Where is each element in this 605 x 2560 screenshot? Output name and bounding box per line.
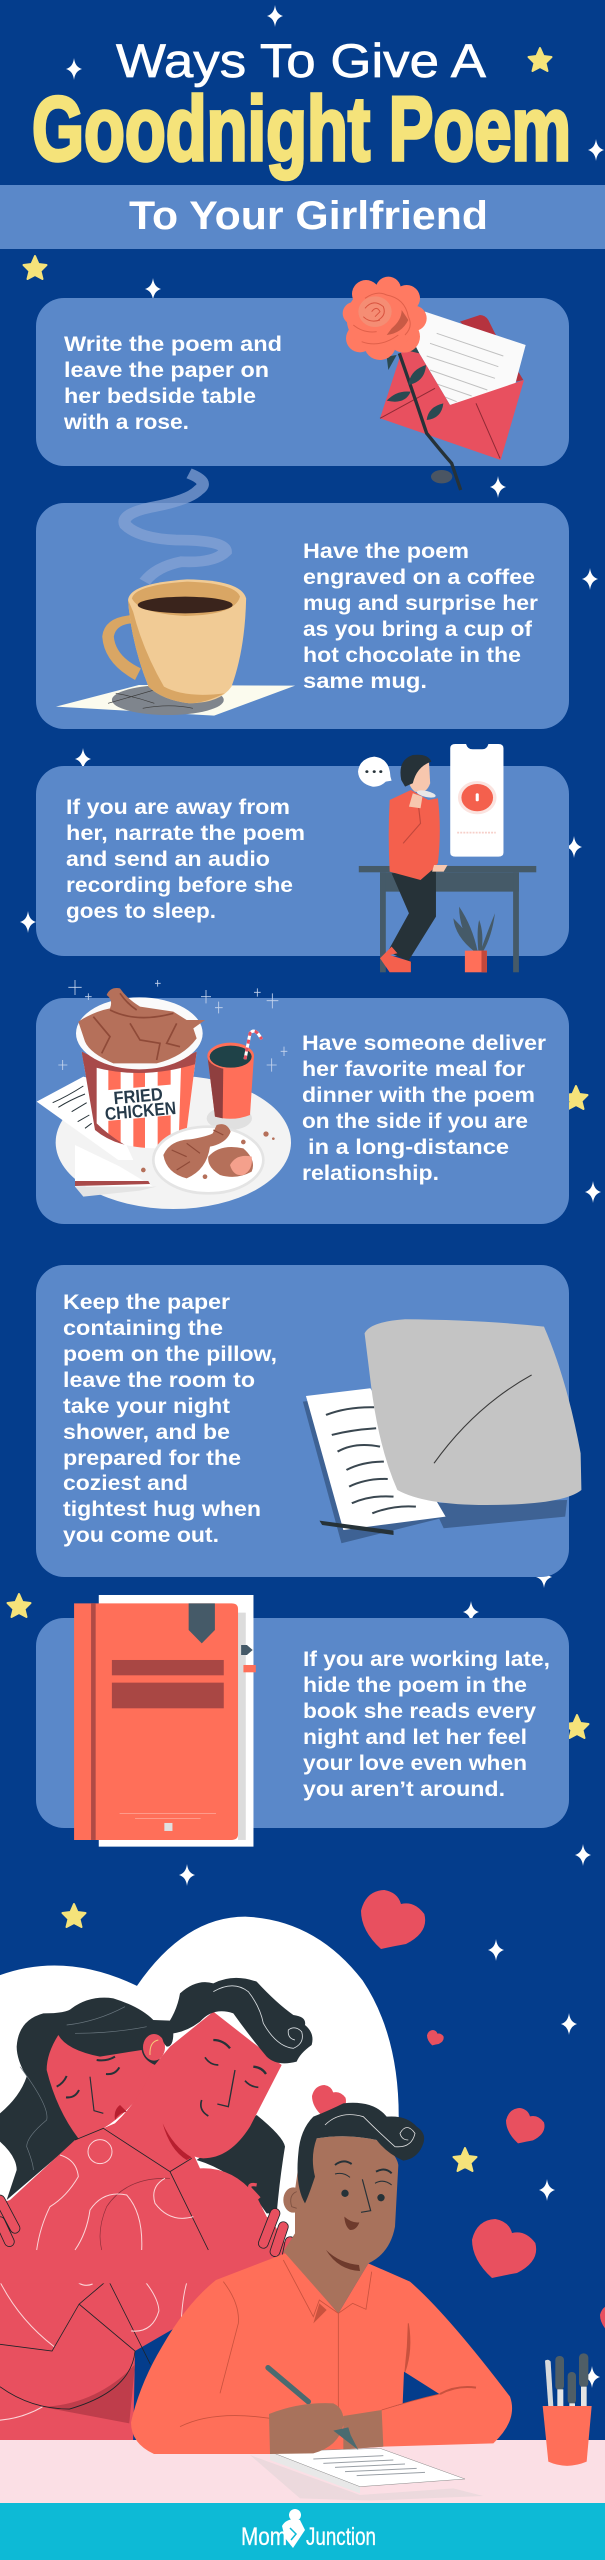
text: tip 1 bbox=[63, 333, 282, 434]
panel: tip 4 background bbox=[36, 998, 569, 1224]
text: tip 5: leave the room to bbox=[63, 1369, 255, 1392]
icon: red book bbox=[74, 1595, 256, 1847]
ear detail bbox=[291, 2192, 297, 2208]
icon: fried chicken meal: CHICKEN bbox=[104, 1098, 177, 1124]
phone bbox=[450, 744, 503, 857]
text: tip 2: same mug. bbox=[303, 670, 427, 693]
text: tip 6: book she reads every bbox=[303, 1700, 536, 1723]
panel: tip 2 background bbox=[36, 503, 569, 729]
text: tip 5: poem on the pillow, bbox=[63, 1343, 277, 1366]
text: tip 5: Keep the paper bbox=[63, 1291, 230, 1314]
text: tip 1: leave the paper on bbox=[64, 359, 269, 382]
icon: floating hearts bbox=[361, 1890, 605, 2333]
text: tip 2: hot chocolate in the bbox=[303, 644, 521, 667]
arm gap bbox=[403, 2372, 439, 2404]
arm gap front bbox=[382, 2372, 439, 2410]
text: tip 4: on the side if you are bbox=[302, 1110, 528, 1133]
pen bbox=[268, 2368, 308, 2402]
hair bbox=[297, 2103, 424, 2203]
hugging man's head bbox=[103, 2012, 282, 2172]
icon: fried chicken meal: FRIED bbox=[113, 1084, 164, 1108]
subtitle band bbox=[0, 185, 605, 249]
text: tip 4: in a long-distance bbox=[308, 1136, 509, 1159]
icon: pillow with poem paper bbox=[303, 1319, 581, 1543]
text: tip 1: with a rose. bbox=[63, 411, 189, 434]
plant bbox=[453, 907, 495, 972]
facial features bbox=[325, 2115, 415, 2271]
hugging man's features bbox=[201, 1986, 302, 2116]
text: tip 3 bbox=[66, 796, 305, 923]
woman's lips bbox=[115, 2105, 127, 2120]
icon: man recording a voice message at a desk bbox=[358, 744, 536, 972]
panel: tip 3 background bbox=[36, 766, 569, 956]
text: tip 2: mug and surprise her bbox=[303, 592, 538, 615]
text: tip 1: her bedside table bbox=[64, 385, 256, 408]
text: tip 2 bbox=[303, 540, 538, 693]
hands bbox=[269, 2403, 383, 2454]
logo bbox=[241, 2509, 376, 2551]
back outlines bbox=[37, 2128, 259, 2250]
text: tip 3: goes to sleep. bbox=[66, 900, 216, 923]
text: tip 3: recording before she bbox=[66, 874, 293, 897]
icon: fried chicken meal bbox=[37, 980, 291, 1209]
text: tip 6: you aren’t around. bbox=[303, 1778, 505, 1801]
panel: tip 5 background bbox=[36, 1265, 569, 1577]
text: tip 5: tightest hug when bbox=[63, 1498, 261, 1521]
ear highlight bbox=[150, 2040, 158, 2055]
text: tip 4: her favorite meal for bbox=[302, 1058, 525, 1081]
text: tip 4: relationship. bbox=[302, 1162, 439, 1185]
text: tip 6: your love even when bbox=[303, 1752, 527, 1775]
icon: rose and envelope bbox=[343, 277, 526, 490]
pen cup bbox=[543, 2353, 592, 2466]
ear bbox=[283, 2187, 303, 2213]
text: tip 5: you come out. bbox=[63, 1524, 219, 1547]
text: tip 5: prepared for the bbox=[63, 1447, 241, 1470]
title: Ways To Give A bbox=[116, 34, 487, 87]
text: tip 4 bbox=[302, 1032, 546, 1185]
upper body bbox=[0, 2067, 290, 2283]
woman's face bbox=[47, 2035, 155, 2138]
text: tip 2: Have the poem bbox=[303, 540, 469, 563]
text: tip 6 bbox=[303, 1648, 550, 1801]
text: tip 3: and send an audio bbox=[66, 848, 270, 871]
hugging man's hair bbox=[162, 1978, 312, 2063]
table bbox=[359, 866, 536, 972]
head and neck bbox=[283, 2136, 398, 2313]
woman's hair bbox=[0, 1998, 285, 2213]
text: tip 5 bbox=[63, 1291, 277, 1547]
text: tip 6: If you are working late, bbox=[303, 1648, 550, 1671]
text: tip 5: take your night bbox=[63, 1395, 230, 1418]
chin shadow bbox=[163, 2123, 192, 2160]
footer band bbox=[0, 2503, 605, 2560]
text: tip 4: Have someone deliver bbox=[302, 1032, 546, 1055]
icon: coffee mug on a paper bbox=[56, 473, 295, 716]
hands on shoulders bbox=[0, 2200, 290, 2258]
text: tip 6: night and let her feel bbox=[303, 1726, 527, 1749]
speech bubble bbox=[358, 757, 392, 787]
shirt bbox=[131, 2253, 512, 2454]
couple's heads and upper bodies bbox=[0, 1978, 312, 2283]
panel: tip 1 background bbox=[36, 298, 569, 466]
text: tip 3: If you are away from bbox=[66, 796, 290, 819]
subtitle band: To Your Girlfriend bbox=[129, 194, 488, 238]
panel: tip 6 background bbox=[36, 1618, 569, 1828]
text: tip 4: dinner with the poem bbox=[302, 1084, 535, 1107]
couple's lower body bbox=[0, 2217, 285, 2442]
text: tip 3: her, narrate the poem bbox=[66, 822, 305, 845]
text: tip 2: engraved on a coffee bbox=[303, 566, 535, 589]
text: tip 2: as you bring a cup of bbox=[303, 618, 533, 641]
desk bbox=[0, 2440, 605, 2503]
woman's features bbox=[20, 2007, 147, 2170]
paper on desk bbox=[270, 2448, 465, 2493]
white heart backdrop bbox=[0, 1917, 399, 2262]
logo: Mom bbox=[241, 2523, 287, 2551]
seated man writing bbox=[131, 2103, 592, 2501]
text: tip 6: hide the poem in the bbox=[303, 1674, 527, 1697]
shirt details bbox=[180, 2260, 476, 2427]
paper shadow bbox=[250, 2455, 483, 2501]
person bbox=[380, 755, 448, 972]
ear bbox=[143, 2034, 165, 2061]
text: tip 1: Write the poem and bbox=[64, 333, 282, 356]
logo: Junction bbox=[306, 2523, 376, 2551]
title bbox=[32, 34, 571, 180]
pen tip bbox=[333, 2427, 358, 2450]
heart behind seated man bbox=[312, 2085, 346, 2116]
text: tip 5: containing the bbox=[63, 1317, 223, 1340]
text: tip 5: shower, and be bbox=[63, 1421, 230, 1444]
text: tip 5: coziest and bbox=[63, 1472, 188, 1495]
